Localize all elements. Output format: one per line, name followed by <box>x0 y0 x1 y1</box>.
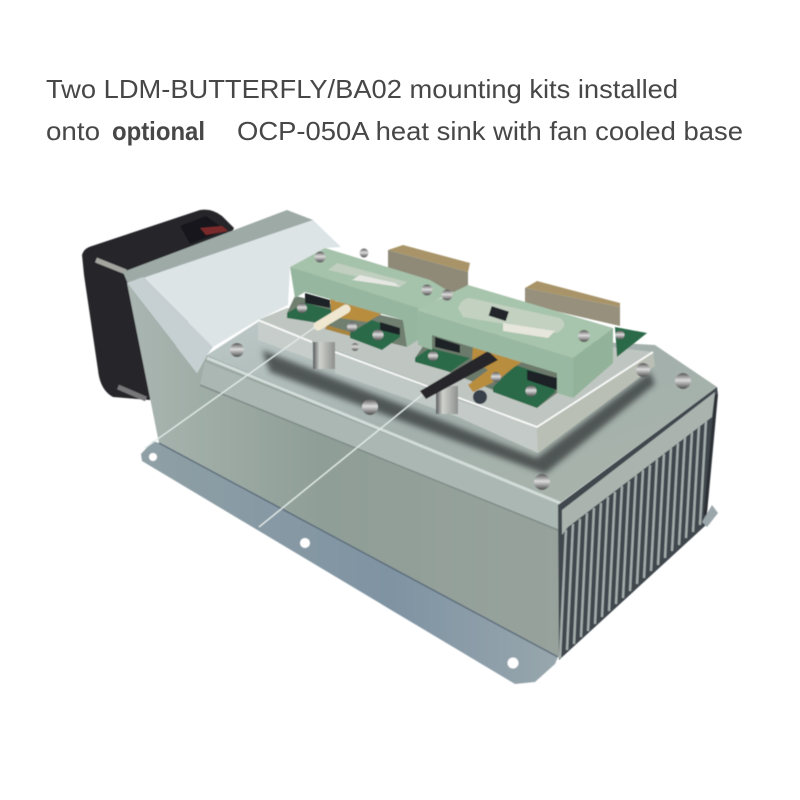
title: optional <box>112 116 205 146</box>
circuit boards <box>287 293 647 408</box>
screws <box>230 248 691 490</box>
green fixture right <box>417 285 613 398</box>
butterfly laser right <box>420 338 525 404</box>
connectors <box>388 245 620 326</box>
aluminium mounting plate <box>258 308 655 453</box>
title <box>46 74 743 146</box>
upper fold of side panel <box>200 362 560 530</box>
window backing <box>287 296 557 408</box>
fan shroud <box>123 210 341 373</box>
flange with mounting holes <box>141 441 558 684</box>
photo: heat sink assembly <box>82 210 718 684</box>
title: OCP-050A heat sink with fan cooled base <box>237 116 743 146</box>
green fixture left <box>290 248 450 347</box>
standoff discs <box>313 342 335 369</box>
plate shadow <box>262 350 655 474</box>
title: Two LDM-BUTTERFLY/BA02 mounting kits installed <box>46 74 678 104</box>
side panel of body <box>127 283 560 657</box>
fan screw rods <box>96 260 126 272</box>
title: onto <box>46 116 100 146</box>
cooling fan <box>82 210 234 400</box>
fibre lines <box>145 327 422 527</box>
butterfly laser left <box>318 293 385 336</box>
heat sink fins <box>558 387 718 660</box>
top surface of base plate <box>207 322 717 503</box>
